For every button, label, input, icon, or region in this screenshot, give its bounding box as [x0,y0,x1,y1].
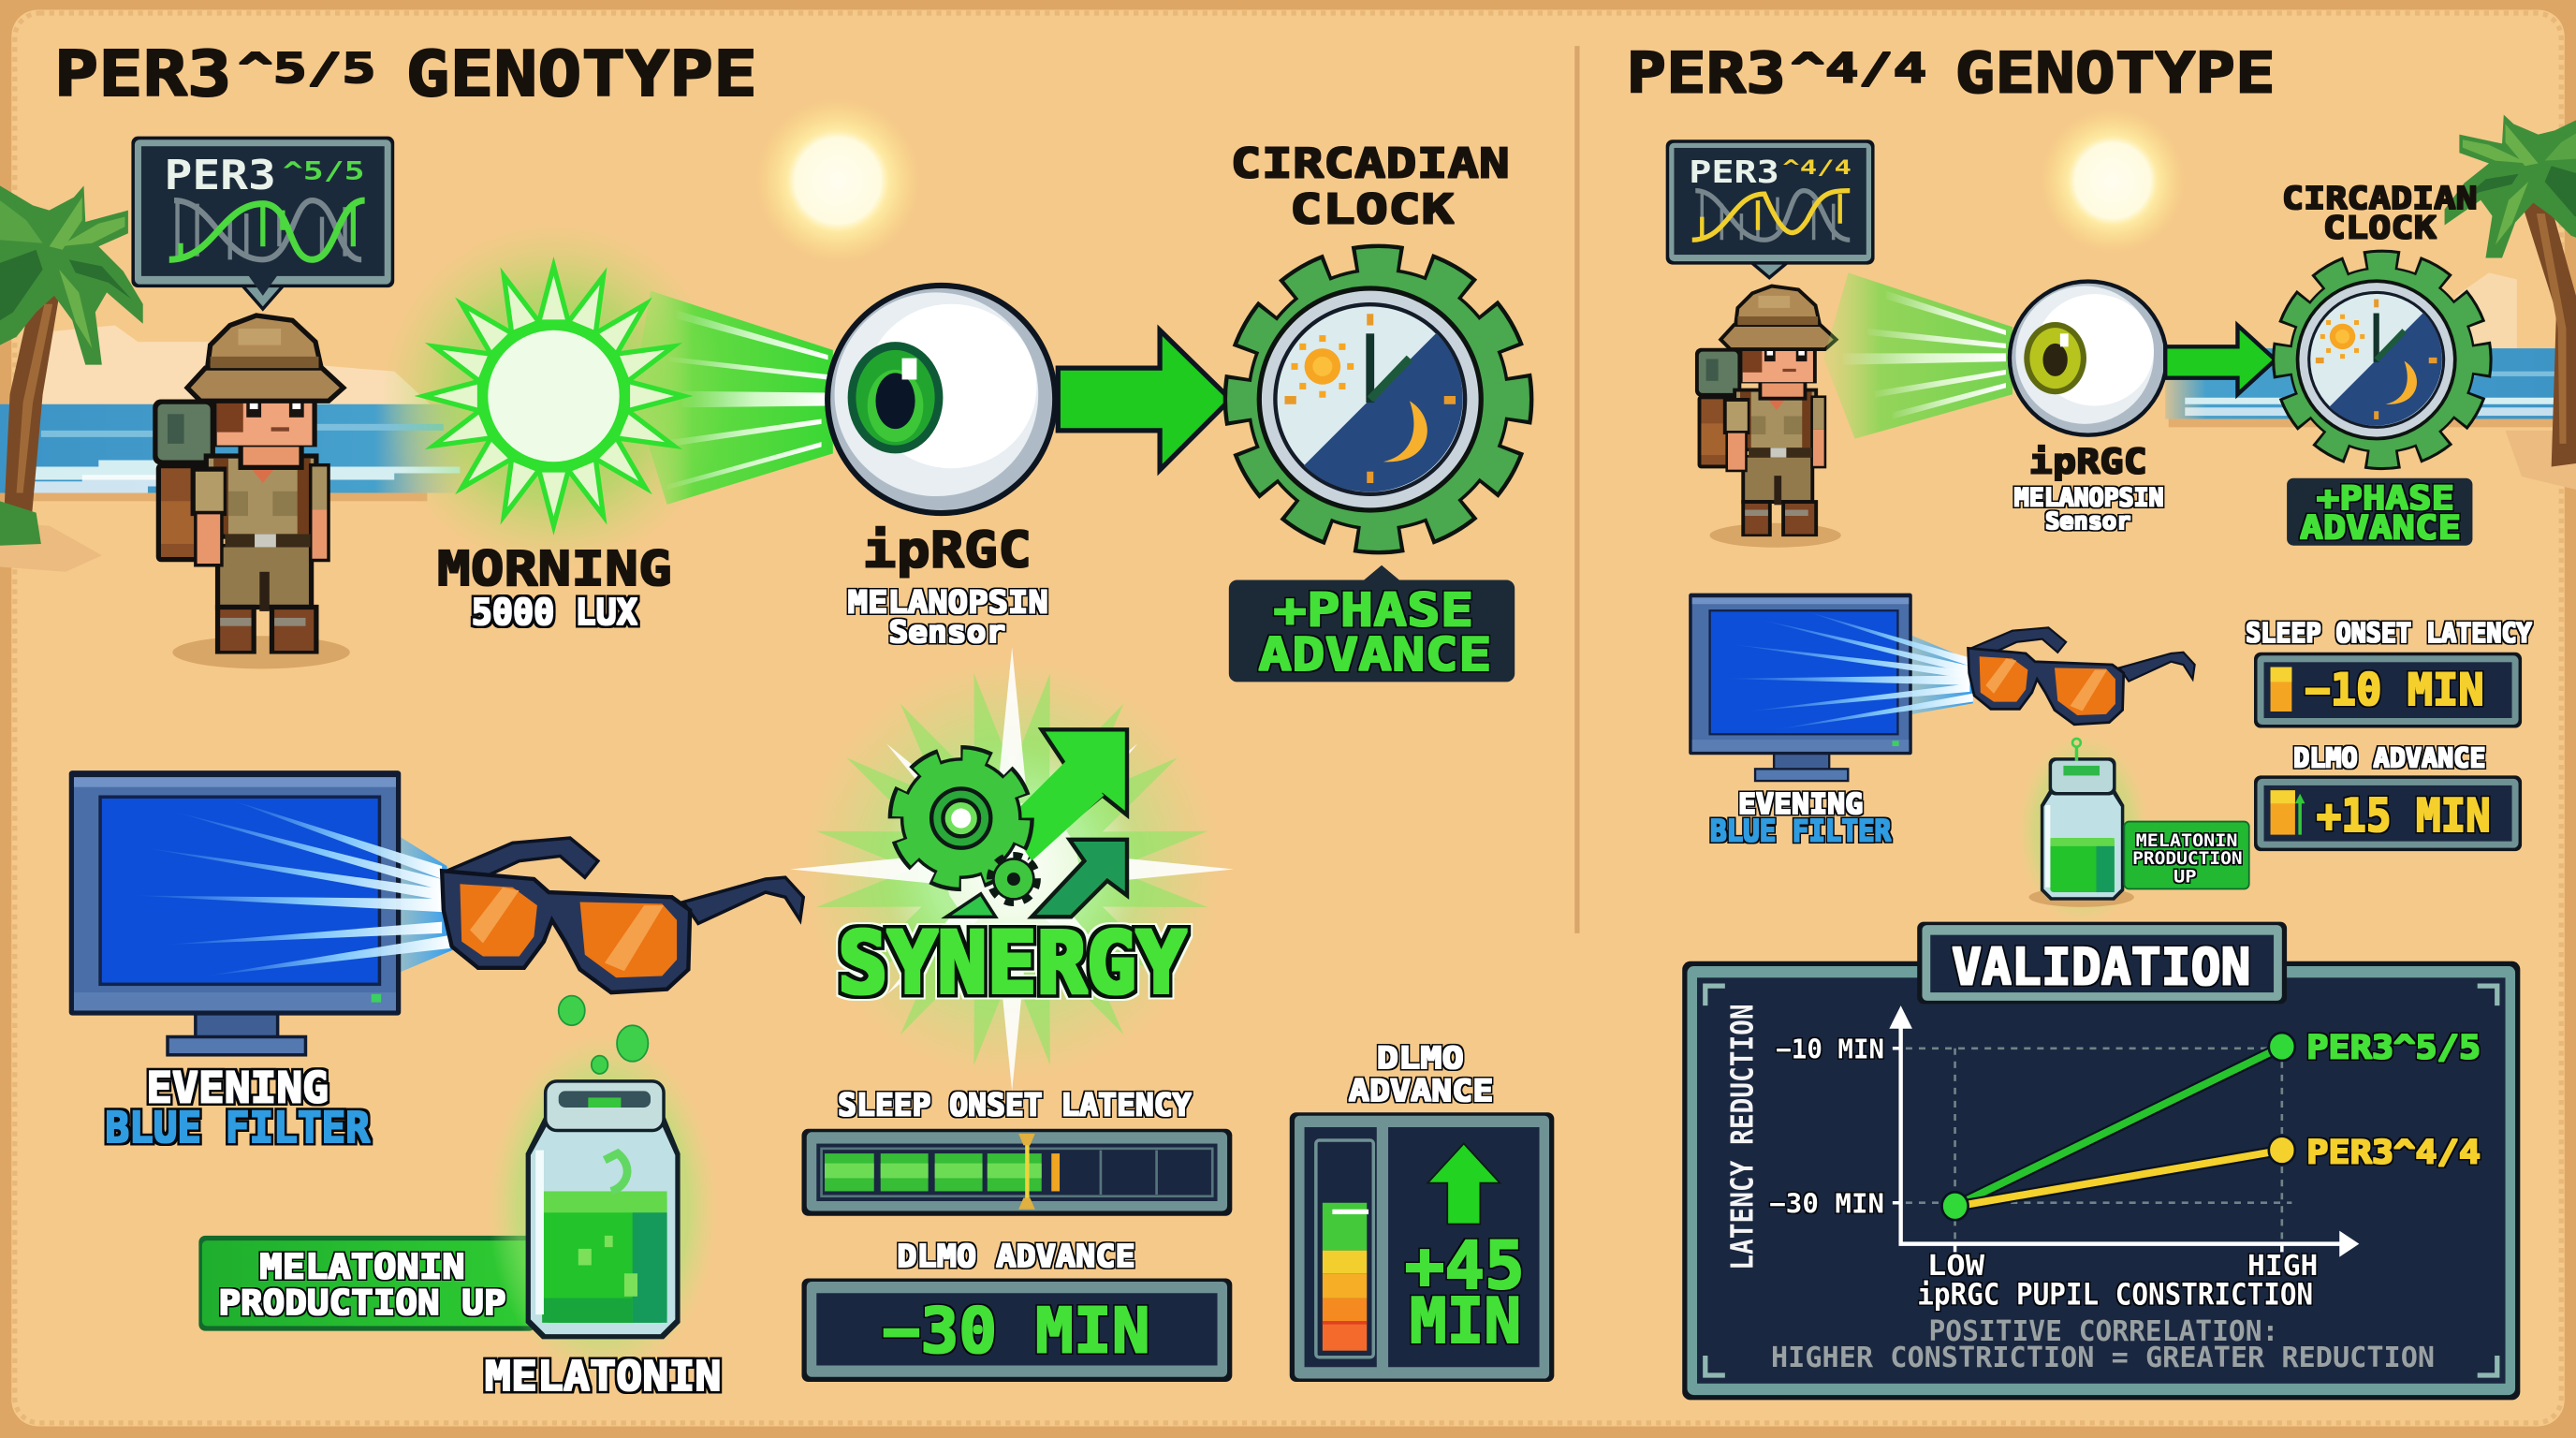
callout: PER3 5/5 DNA bubble: ^5/5 [283,157,365,185]
chart: correlation note [1771,1315,2435,1374]
label: circadian clock: CIRCADIAN [1231,140,1510,188]
title: PER3 4/4 genotype [1627,41,2276,106]
beam: green light left [633,291,833,505]
panel: minus 30 min readout: −30 MIN [882,1294,1150,1367]
icon: green morning sun [381,224,726,568]
label: circadian clock right: CIRCADIAN [2282,180,2478,216]
callout: PER3 5/5 DNA bubble: PER3 [165,152,276,199]
icon: synergy burst [790,648,1234,1091]
title: PER3 5/5 genotype [54,37,757,110]
background: right beach scene [2165,272,2576,490]
label: DLMO advance stacked: DLMO [1377,1042,1464,1076]
callout: phase advance right: +PHASE [2317,479,2454,518]
label: circadian clock right [2282,180,2478,246]
label: DLMO advance: DLMO ADVANCE [897,1238,1135,1274]
label: evening blue filter right: EVENING [1738,788,1863,821]
callout: phase advance right [2287,478,2472,548]
label: synergy: SYNERGY [838,913,1186,1013]
icon: sun left [755,98,920,263]
panel: minus 10 min: −10 MIN [2305,665,2484,716]
callout: phase advance left [1229,565,1515,682]
chart: PER3 4/4 line: PER3^4/4 [2306,1134,2481,1172]
label: DLMO advance stacked: ADVANCE [1349,1075,1493,1108]
label: circadian clock [1231,140,1510,234]
chart: y axis title: LATENCY REDUCTION [1724,1004,1761,1270]
panel: minus 10 min [2254,653,2522,728]
icon: gear clock right [2284,262,2481,458]
icon: gear clock left [1240,261,1516,537]
icon: green-iris eye [825,283,1058,516]
label: morning 5000 lux [437,542,672,634]
callout: phase advance left: +PHASE [1273,583,1473,638]
banner: melatonin production up [198,1236,535,1331]
label: DLMO advance right: DLMO ADVANCE [2293,743,2485,774]
chart: PER3 5/5 line [1955,1028,2481,1206]
chart: correlation note: POSITIVE CORRELATION: [1928,1315,2278,1348]
beam: green light right [1823,272,2012,439]
icon: melatonin jar left [488,996,718,1380]
icon: right palm tree [2445,115,2576,466]
tab: validation heading: VALIDATION [1952,937,2250,996]
panel: plus 45 min gauge [1290,1112,1554,1382]
icon: sun right [2041,109,2185,253]
icon: yellow-iris eye [2008,279,2169,437]
arrow: eye to clock right [2165,326,2276,394]
arrow: eye to clock [1058,330,1231,470]
banner: melatonin production up: MELATONIN [259,1246,465,1286]
label: ipRGC right [2014,441,2163,535]
label: evening blue filter right [1710,788,1892,849]
label: ipRGC right: Sensor [2045,507,2130,535]
banner: melatonin production up: PRODUCTION UP [218,1283,506,1323]
tab: validation heading [1917,922,2287,1004]
icon: left palm tree [0,185,143,546]
banner: melatonin production up right: MELATONIN [2136,831,2237,851]
label: circadian clock right: CLOCK [2323,210,2437,246]
banner: melatonin production up right [2124,822,2249,889]
label: evening blue filter [105,1064,370,1152]
label: sleep onset latency right: SLEEP ONSET LATENCY [2246,618,2532,649]
panel: minus 30 min readout [801,1278,1232,1382]
chart: axis value labels: −30 MIN [1769,1188,1884,1219]
label: DLMO advance stacked [1349,1042,1493,1108]
character: explorer right [1695,286,1841,548]
icon: monitor left with blue beams [69,770,453,1055]
divider between genotypes [1574,46,1580,933]
icon: monitor right with blue beams [1689,594,1973,781]
label: sleep onset latency: SLEEP ONSET LATENCY [838,1087,1191,1123]
chart: axis value labels: ipRGC PUPIL CONSTRICTION [1917,1279,2313,1313]
callout: phase advance left: ADVANCE [1258,627,1492,682]
chart: PER3 4/4 line [1942,1134,2481,1220]
panel: validation chart [1682,922,2520,1400]
title: PER3 4/4 genotype: PER3 [1627,41,1786,106]
chart: axis value labels: −10 MIN [1776,1034,1884,1064]
title: PER3 4/4 genotype: GENOTYPE [1955,41,2276,106]
chart: axis value labels: LOW [1927,1250,1984,1283]
label: ipRGC melanopsin sensor [848,522,1048,650]
callout: PER3 4/4 DNA bubble [1666,139,1875,278]
callout: PER3 4/4 DNA bubble: ^4/4 [1782,155,1852,179]
panel: sleep onset latency progress bar [801,1129,1232,1216]
title: PER3 5/5 genotype: PER3 [54,37,231,110]
panel: plus 45 min gauge: +45 [1405,1227,1525,1304]
label: evening blue filter right: BLUE FILTER [1710,815,1892,849]
label: morning 5000 lux: 5000 LUX [472,592,637,634]
chart: correlation note: HIGHER CONSTRICTION = GREATER REDUCTION [1771,1342,2435,1374]
label: ipRGC right: ipRGC [2029,441,2147,481]
character: explorer left [153,315,350,668]
chart: grid and axes [1889,1005,2359,1257]
title: PER3 5/5 genotype: ^5/5 [238,45,376,93]
icon: melatonin jar right [2017,735,2149,925]
icon: orange glasses right [1969,627,2195,725]
panel: plus 45 min gauge: MIN [1410,1284,1521,1357]
label: ipRGC melanopsin sensor: ipRGC [862,522,1032,580]
label: morning 5000 lux: MORNING [437,542,672,597]
icon: orange glasses left [442,838,803,992]
label: evening blue filter: BLUE FILTER [105,1103,370,1152]
banner: melatonin production up right: PRODUCTION [2132,849,2243,869]
label: evening blue filter: EVENING [146,1064,329,1113]
label: circadian clock: CLOCK [1290,186,1455,234]
title: PER3 5/5 genotype: GENOTYPE [406,37,757,110]
panel: plus 15 min: +15 MIN [2317,788,2491,843]
label: ipRGC right: MELANOPSIN [2014,485,2163,513]
background: left beach scene [0,326,468,572]
callout: phase advance right: ADVANCE [2300,509,2461,548]
title: PER3 4/4 genotype: ^4/4 [1791,45,1927,93]
label: ipRGC melanopsin sensor: MELANOPSIN [848,584,1048,621]
label: ipRGC melanopsin sensor: Sensor [889,616,1005,650]
chart: PER3 5/5 line: PER3^5/5 [2306,1028,2481,1066]
panel: plus 15 min [2254,775,2522,851]
chart: axis value labels [1769,1034,2318,1313]
callout: PER3 5/5 DNA bubble [131,137,394,309]
chart: axis value labels: HIGH [2247,1250,2318,1283]
banner: melatonin production up right: UP [2174,868,2197,888]
callout: PER3 4/4 DNA bubble: PER3 [1689,154,1779,190]
label: melatonin: MELATONIN [485,1353,721,1401]
